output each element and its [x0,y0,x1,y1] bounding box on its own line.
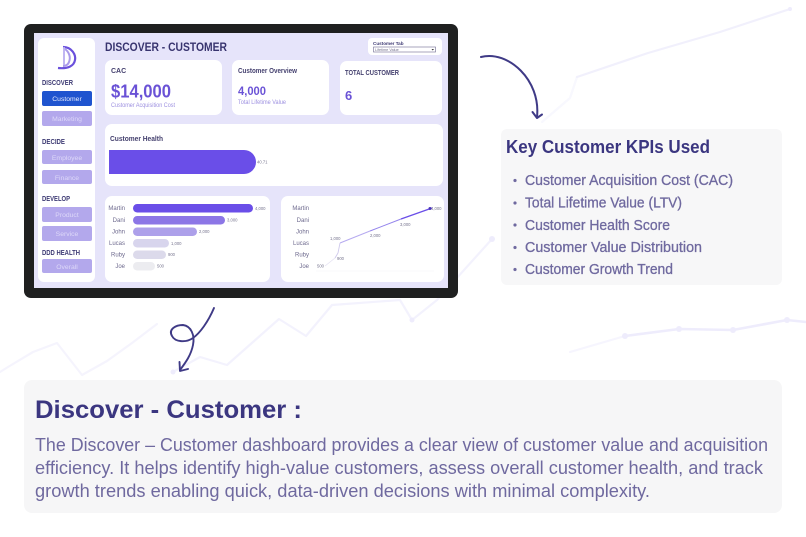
KPI list: Customer Acquisition Cost (CAC) [525,173,733,189]
description body text [35,435,768,501]
sidebar navigation: Overall [56,264,78,271]
sidebar navigation [38,38,95,282]
card: customer overview: Customer Overview [238,68,297,75]
card: CAC: Customer Acquisition Cost [111,103,175,109]
line chart: customer growth trend: 4,000 [431,206,442,211]
line chart: customer growth trend: Martin [292,206,309,212]
line chart: customer growth trend: Lucas [293,241,309,247]
description body text: growth trends enabling quick, data-driven decisions with minimal complexity. [35,481,650,501]
customer tab filter: Customer Tab [373,41,404,46]
sidebar navigation: DEVELOP [42,196,70,203]
arrow: dashboard to description with loop [171,308,214,371]
description body text: The Discover – Customer dashboard provides a clear view of customer value and acquisition [35,435,768,455]
customer tab filter [368,38,442,55]
sidebar navigation: Finance [55,175,79,182]
bar chart: customer value distribution: John [112,230,125,236]
KPI list: Total Lifetime Value (LTV) [525,196,682,212]
bar chart: customer value distribution: 2,000 [199,229,210,234]
panel: key customer KPIs [501,129,782,285]
card: CAC [105,60,222,115]
bar chart: customer value distribution: 500 [157,264,165,268]
card: customer overview: Total Lifetime Value [238,100,287,106]
KPI list: Customer Health Score [525,218,670,234]
line chart: customer growth trend: John [296,230,309,236]
bar chart: customer value distribution: Lucas [109,241,125,247]
card: total customer: 6 [345,88,352,103]
description body text: efficiency. It helps identify high-value customers, assess overall customer health, and track [35,458,764,478]
description heading: Discover - Customer : [35,396,302,424]
bar chart: customer value distribution: 4,000 [255,206,266,211]
card: customer health gauge bar: 40.71 [257,160,268,164]
sidebar navigation: DISCOVER [42,80,73,87]
bar chart: customer value distribution: 1,000 [171,241,182,246]
sidebar navigation: DDD HEALTH [42,250,80,257]
line chart: customer growth trend: Joe [299,264,310,270]
card: customer overview [232,60,329,115]
card: total customer [340,61,442,115]
line chart: customer growth trend [281,196,444,282]
laptop dashboard mockup [24,24,458,298]
card: customer health gauge bar: Customer Health [110,136,163,143]
KPI heading: Key Customer KPIs Used [506,137,710,157]
sidebar navigation: Employee [52,155,82,162]
sidebar navigation: Customer [52,96,82,103]
customer tab filter: Lifetime Value [375,48,399,52]
bar chart: customer value distribution: Martin [108,206,125,212]
card: CAC: CAC [111,68,126,75]
line chart: customer growth trend: 3,000 [400,222,411,227]
sidebar navigation: DECIDE [42,139,65,146]
bar chart: customer value distribution: 900 [168,252,176,257]
sidebar navigation: Product [55,212,79,219]
line chart: customer growth trend: Dani [297,218,309,224]
card: customer overview: 4,000 [238,84,266,98]
line chart: customer growth trend: 900 [337,256,345,261]
line chart: customer growth trend: 500 [317,264,325,268]
card: total customer: TOTAL CUSTOMER [345,70,399,77]
KPI list: Customer Growth Trend [525,262,673,278]
KPI list: Customer Value Distribution [525,240,702,256]
panel: description [24,380,782,513]
dashboard title: DISCOVER - CUSTOMER [105,40,227,54]
sidebar navigation: Service [56,231,79,238]
logo icon [58,47,75,68]
card: customer health gauge bar [105,124,443,186]
arrow: dashboard to KPI panel [481,56,542,118]
line chart: customer growth trend: 1,000 [330,236,341,241]
bar chart: customer value distribution: 3,000 [227,218,238,222]
KPI list [514,173,733,278]
card: CAC: $14,000 [111,82,171,102]
bar chart: customer value distribution: Ruby [111,252,125,258]
bar chart: customer value distribution [105,196,270,282]
bar chart: customer value distribution: Dani [113,218,125,224]
line chart: customer growth trend: 2,000 [370,233,381,238]
line chart: customer growth trend: Ruby [295,252,309,258]
sidebar navigation: Marketing [52,116,82,123]
bar chart: customer value distribution: Joe [115,264,126,270]
